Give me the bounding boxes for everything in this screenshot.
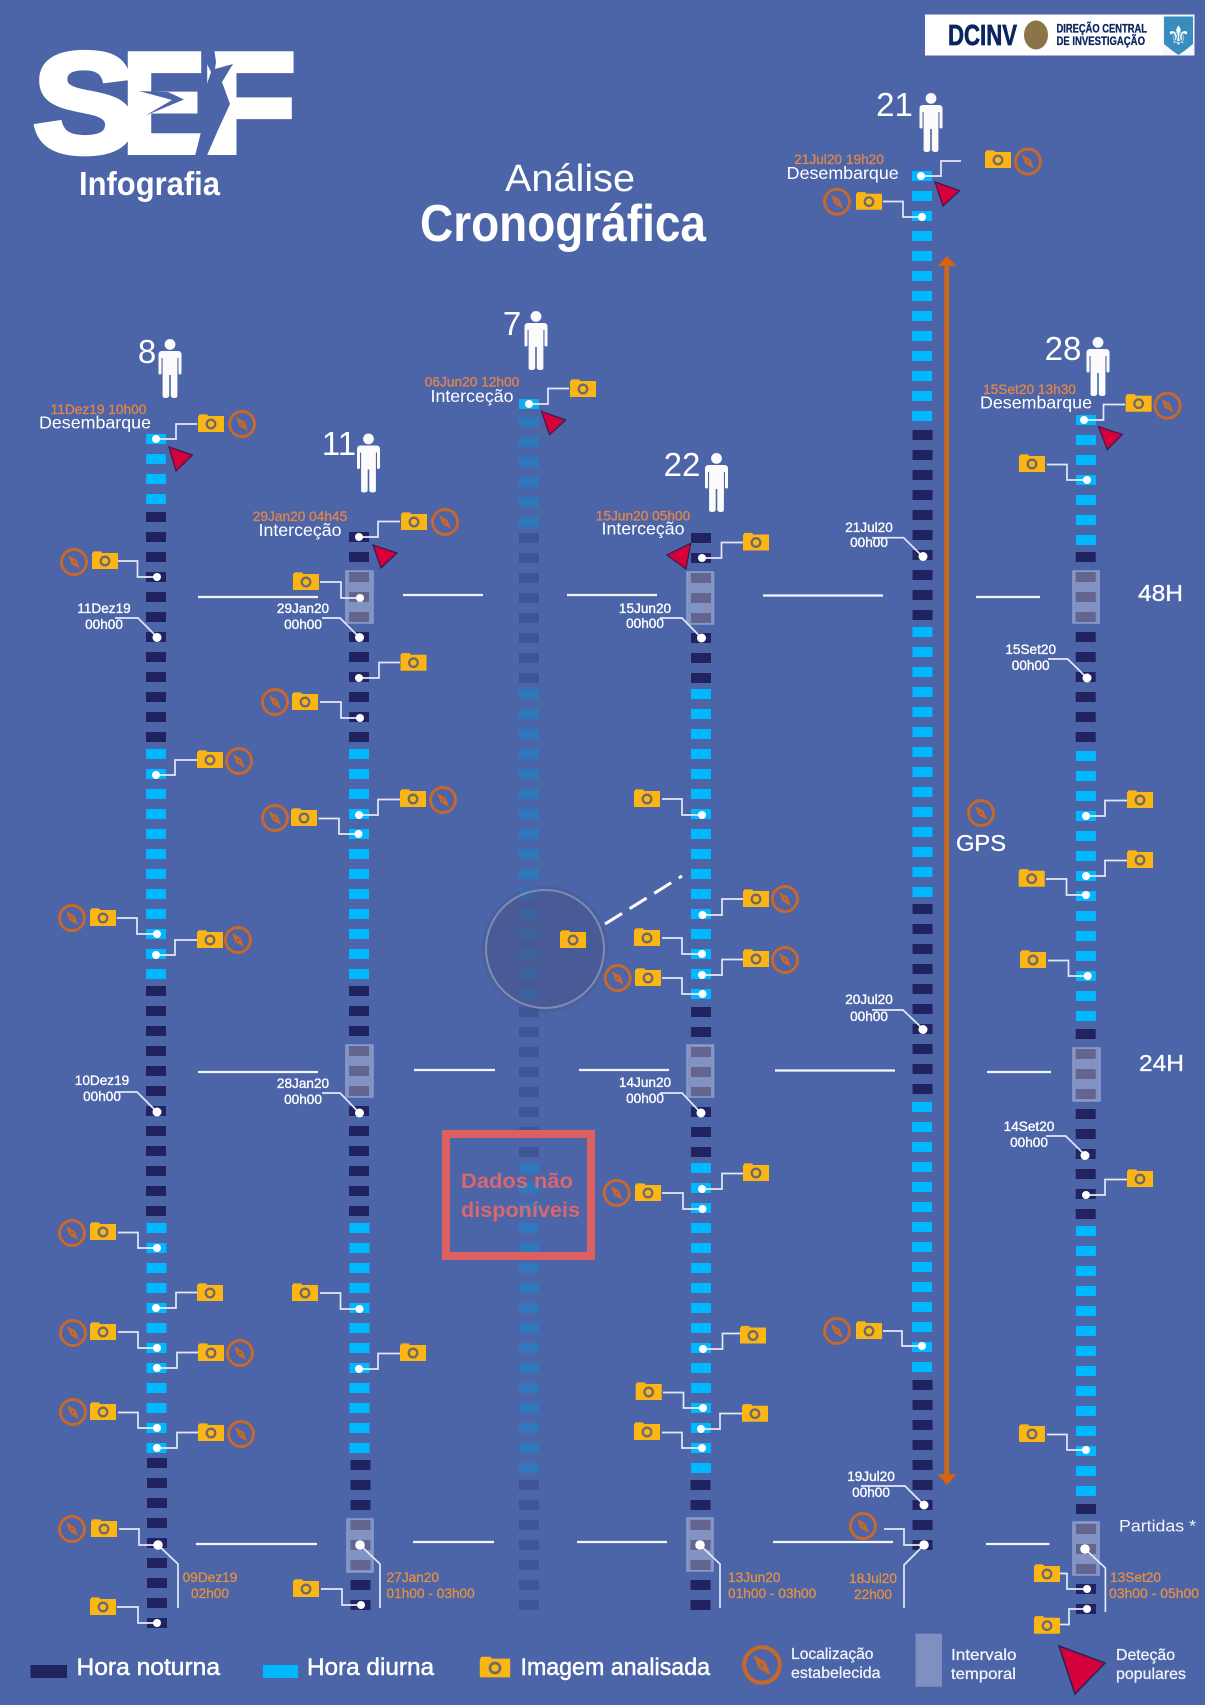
popular detection triangle	[373, 545, 397, 568]
callout: data not available	[446, 1134, 591, 1256]
event: camera and GPS	[355, 510, 458, 541]
person count: 7: 7	[503, 305, 521, 342]
event: camera	[1019, 454, 1091, 484]
event: camera	[1082, 1169, 1153, 1199]
arrival label: 21Jul20 19h20	[794, 152, 884, 167]
date: 19Jul20: 00h00	[852, 1485, 890, 1500]
date: 15Jun20	[619, 601, 706, 642]
event: camera	[697, 1404, 768, 1433]
faded hour bars	[519, 399, 539, 1610]
date: 14Jun20: 00h00	[626, 1091, 664, 1106]
date: 10Dez19: 10Dez19	[75, 1073, 129, 1088]
event: camera	[293, 572, 364, 602]
interception label: Interceção	[430, 386, 514, 406]
person count: 22: 22	[664, 446, 700, 483]
title	[420, 158, 707, 253]
event: camera	[1034, 1605, 1091, 1634]
GPS label	[956, 800, 1006, 856]
label: 24H: 24H	[1139, 1050, 1184, 1076]
legend: location established	[744, 1646, 881, 1683]
departure date: 13Set20: 13Set20	[1110, 1570, 1161, 1585]
date: 20Jul20	[845, 992, 928, 1034]
date: 19Jul20	[847, 1469, 928, 1510]
event: camera and GPS	[604, 1180, 706, 1213]
GPS label: GPS	[956, 830, 1006, 856]
date: 15Set20: 15Set20	[1005, 642, 1056, 657]
event: camera	[698, 1163, 769, 1193]
legend: analysed image: Imagem analisada	[520, 1654, 711, 1681]
date: 28Jan20: 28Jan20	[277, 1076, 330, 1091]
event: camera and GPS	[62, 550, 161, 581]
timeline: case 7	[425, 305, 682, 1610]
date: 20Jul20: 00h00	[850, 1009, 888, 1024]
event: camera	[698, 533, 769, 562]
legend: time interval: temporal	[951, 1666, 1016, 1683]
event: camera	[634, 1422, 706, 1452]
event: camera and GPS	[262, 806, 362, 838]
event: camera	[292, 1283, 364, 1313]
event: camera	[634, 789, 706, 819]
popular detection triangle	[667, 543, 691, 569]
badge: DCINV banner: ⚜	[1166, 21, 1191, 52]
departure date: 13Jun20: 01h00 - 03h00	[728, 1586, 817, 1601]
person count: 11: 11	[322, 425, 356, 462]
badge: DCINV banner: DIREÇÃO CENTRAL	[1056, 22, 1147, 36]
callout: data not available: disponíveis	[461, 1198, 580, 1222]
departure date: 09Dez19	[153, 1540, 237, 1608]
event: camera and GPS	[153, 1340, 252, 1372]
date: 14Jun20	[619, 1075, 706, 1118]
time interval: 24H	[1073, 1048, 1100, 1101]
time interval: departure	[347, 1519, 373, 1572]
event: camera	[1019, 1424, 1090, 1454]
event: camera and GPS	[153, 1422, 254, 1452]
departure date: 13Jun20: 13Jun20	[728, 1570, 781, 1585]
event: camera and GPS	[824, 1318, 926, 1350]
departure date: 18Jul20: 18Jul20	[849, 1571, 897, 1586]
event: camera and GPS	[152, 928, 250, 959]
interception label: 29Jan20 04h45	[253, 509, 348, 524]
arrival label	[980, 382, 1092, 413]
interception label: Interceção	[258, 520, 342, 540]
person count: 11	[322, 425, 380, 492]
event: camera	[525, 379, 596, 408]
time interval: 24H	[346, 1045, 373, 1097]
hour bars	[359, 532, 360, 1610]
person count: 28	[1045, 330, 1110, 396]
date: 29Jan20: 00h00	[284, 617, 322, 632]
departure date: 13Set20	[1080, 1544, 1199, 1612]
arrival label: Desembarque	[980, 393, 1092, 413]
person count: 22	[664, 446, 728, 512]
legend: popular detection: populares	[1116, 1666, 1186, 1683]
callout: data not available: Dados não	[461, 1169, 573, 1193]
timeline: case 22	[596, 446, 817, 1610]
event: camera and GPS	[60, 1516, 158, 1545]
interception label: 15Jun20 05h00	[596, 509, 691, 524]
timeline: case 28	[980, 330, 1199, 1634]
arrival label: 15Set20 13h30	[983, 382, 1076, 397]
date: 11Dez19: 00h00	[85, 617, 123, 632]
timeline: case 11	[253, 425, 475, 1610]
person count: 21: 21	[876, 86, 913, 123]
event: camera and GPS	[605, 966, 706, 998]
arrival label	[787, 152, 899, 183]
event: camera and GPS	[262, 690, 364, 722]
date: 21Jul20: 00h00	[850, 535, 888, 550]
departure date: 09Dez19: 02h00	[191, 1586, 229, 1601]
badge: DCINV banner	[925, 14, 1194, 56]
arrival label: 11Dez19 10h00	[51, 402, 147, 417]
departure date: 27Jan20: 01h00 - 03h00	[386, 1586, 475, 1601]
horizontal markers: departures row	[196, 1542, 1050, 1544]
event: camera and GPS	[698, 948, 798, 979]
event: camera	[634, 928, 706, 958]
interception label	[425, 374, 520, 406]
legend: popular detection	[1059, 1646, 1186, 1694]
popular detection triangle	[1098, 427, 1122, 450]
legend: time interval: Intervalo	[951, 1647, 1017, 1664]
timeline: case 8	[39, 333, 254, 1628]
hour bars	[912, 171, 932, 1550]
interception label	[253, 509, 348, 540]
title: Análise	[505, 158, 635, 200]
popular detection triangle	[542, 411, 566, 435]
event: camera	[699, 1326, 766, 1353]
popular detection triangle	[935, 182, 960, 206]
event: camera and GPS	[60, 906, 161, 938]
logo: SEF: E	[122, 24, 206, 183]
event: camera and GPS	[355, 788, 456, 819]
hour bars	[1076, 415, 1096, 1614]
logo: SEF	[33, 24, 296, 183]
arrival label: Desembarque	[787, 163, 899, 183]
legend: night hour: Hora noturna	[76, 1654, 221, 1681]
subtitle: Infografia: Infografia	[79, 165, 221, 202]
timeline: case 21	[787, 86, 1040, 1608]
departure date: 18Jul20	[849, 1540, 929, 1608]
interception label: 06Jun20 12h00	[425, 374, 520, 390]
departure date: 27Jan20	[355, 1540, 475, 1608]
event: camera	[1020, 950, 1092, 980]
event: camera	[1082, 790, 1153, 820]
event: camera and GPS	[824, 189, 926, 221]
date: 19Jul20: 19Jul20	[847, 1469, 895, 1484]
departure date: 13Set20: 03h00 - 05h00	[1109, 1586, 1199, 1601]
horizontal markers: 24H row	[198, 1070, 1051, 1072]
date: 10Dez19: 00h00	[83, 1089, 121, 1104]
event: camera and GPS	[60, 1400, 161, 1432]
date: 15Set20	[1005, 642, 1092, 682]
label: 48H: 48H	[1138, 580, 1183, 606]
time interval: 48H	[346, 571, 373, 623]
event: camera	[152, 1283, 223, 1312]
event: camera	[355, 653, 426, 682]
popular detection triangle	[169, 447, 192, 471]
event: camera and GPS	[917, 149, 1040, 180]
date: 29Jan20	[277, 601, 364, 642]
badge: DCINV banner: DCINV	[948, 20, 1017, 52]
date: 14Jun20: 14Jun20	[619, 1075, 672, 1090]
date: 20Jul20: 20Jul20	[845, 992, 893, 1007]
legend: popular detection: Deteção	[1116, 1647, 1175, 1664]
date: 21Jul20: 21Jul20	[845, 520, 893, 535]
event: camera	[355, 1343, 426, 1373]
interception label	[596, 509, 691, 538]
event: camera	[293, 1579, 365, 1609]
hour bars	[690, 533, 711, 1610]
time interval: departure	[1073, 1522, 1099, 1575]
departure date: 18Jul20: 22h00	[854, 1587, 892, 1602]
person count: 28: 28	[1045, 330, 1081, 367]
date: 10Dez19	[75, 1073, 162, 1116]
event: camera and GPS	[152, 748, 252, 779]
person count: 21	[876, 86, 942, 152]
person count: 7	[503, 305, 548, 370]
date: 21Jul20	[845, 520, 928, 561]
event: camera	[1034, 1564, 1091, 1593]
date: 28Jan20	[277, 1076, 364, 1118]
legend	[30, 1634, 1186, 1694]
person count: 8	[138, 333, 182, 398]
event: camera and GPS	[1080, 393, 1180, 424]
time interval: 48H	[1073, 571, 1099, 623]
magnifier callout	[482, 876, 682, 1012]
time interval: 48H	[687, 572, 714, 624]
legend: location established: estabelecida	[791, 1665, 881, 1682]
date: 14Set20: 00h00	[1010, 1135, 1048, 1150]
event: camera and GPS	[152, 412, 254, 443]
title: Cronográfica	[420, 195, 707, 253]
date: 15Set20: 00h00	[1012, 658, 1050, 673]
event: GPS	[850, 1514, 924, 1545]
departure date: 13Jun20	[695, 1540, 817, 1608]
hour bars	[156, 434, 157, 1628]
departure date: 09Dez19: 09Dez19	[183, 1570, 237, 1585]
badge: DCINV banner: DE INVESTIGAÇÃO	[1056, 35, 1145, 48]
horizontal markers: 48H row	[198, 595, 1040, 597]
legend: time interval	[916, 1634, 1017, 1687]
date: 14Set20	[1004, 1119, 1090, 1160]
logo: SEF: F	[200, 24, 296, 183]
date: 15Jun20: 15Jun20	[619, 601, 672, 616]
date: 28Jan20: 00h00	[284, 1092, 322, 1107]
event: camera and GPS	[698, 886, 798, 919]
date: 29Jan20: 29Jan20	[277, 601, 330, 616]
legend: day hour: Hora diurna	[307, 1654, 435, 1681]
time interval: departure	[687, 1518, 713, 1571]
person count: 8: 8	[138, 333, 156, 370]
logo: SEF: S	[33, 24, 136, 183]
event: camera and GPS	[60, 1320, 161, 1352]
date: 11Dez19: 11Dez19	[77, 601, 131, 616]
date: 15Jun20: 00h00	[626, 616, 664, 631]
legend: location established: Localização	[791, 1646, 874, 1663]
event: camera	[1082, 850, 1153, 880]
event: camera	[90, 1597, 161, 1627]
arrow: GPS period	[938, 256, 956, 1485]
time interval: 24H	[687, 1045, 714, 1097]
event: camera	[636, 1382, 707, 1412]
interception label: Interceção	[602, 518, 684, 538]
label: Partidas: Partidas *	[1119, 1518, 1197, 1536]
event: camera	[1019, 869, 1090, 899]
arrival label	[39, 402, 151, 433]
date: 14Set20: 14Set20	[1004, 1119, 1055, 1134]
arrival label: Desembarque	[39, 413, 151, 433]
date: 11Dez19	[77, 601, 162, 642]
departure date: 27Jan20: 27Jan20	[386, 1570, 439, 1585]
event: camera and GPS	[60, 1220, 161, 1252]
